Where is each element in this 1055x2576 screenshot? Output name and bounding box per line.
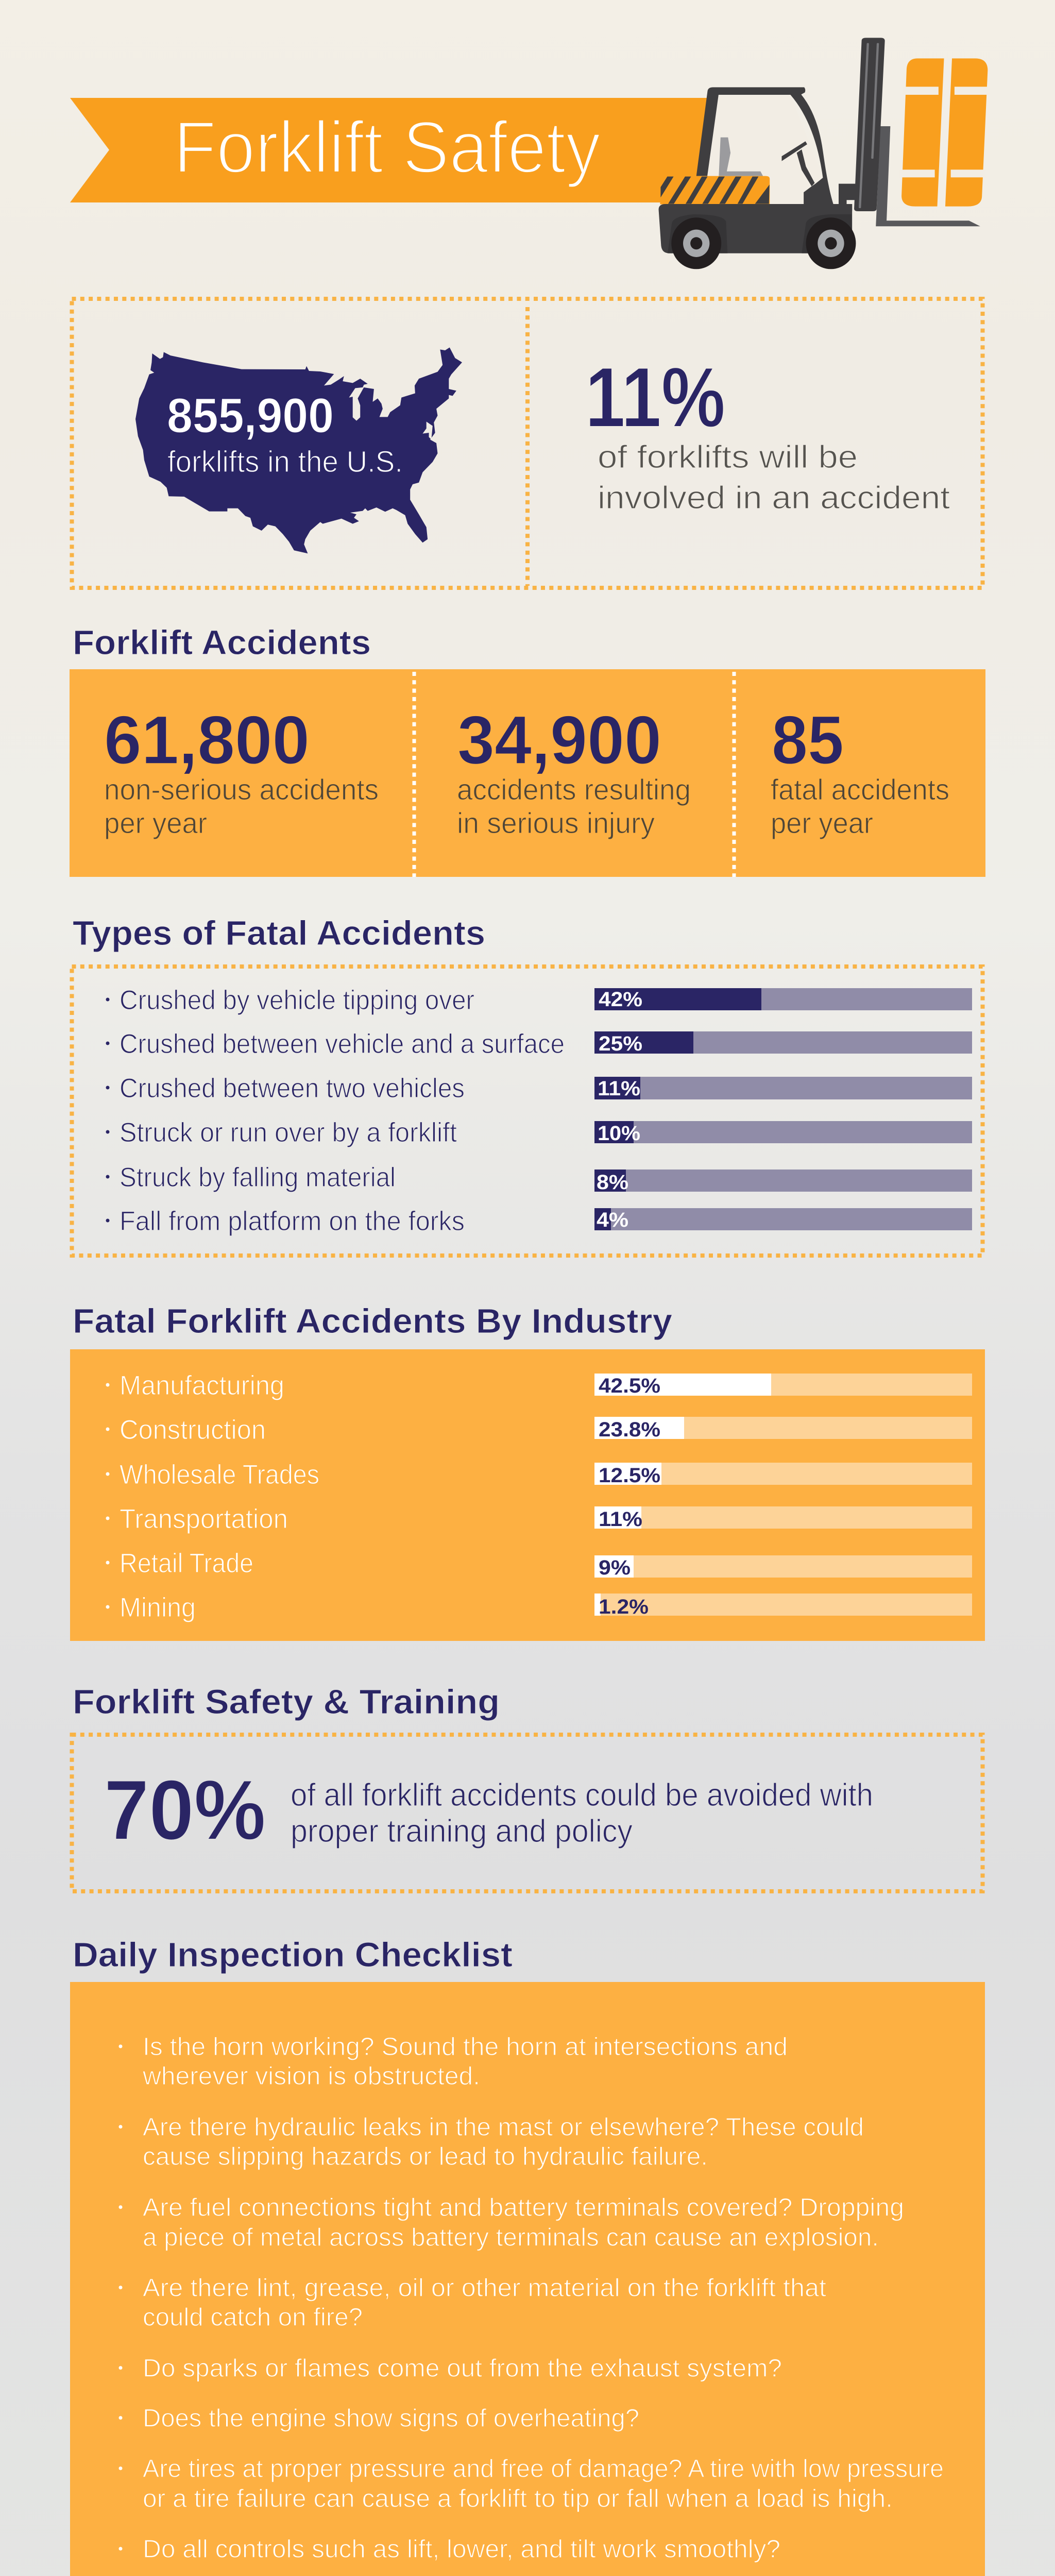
caption: accident share [598, 439, 950, 516]
panel: forklift accidents [70, 669, 985, 877]
chart row: transportation: Transportation [120, 1504, 288, 1534]
checklist item: hydraulic leaks: Are there hydraulic leaks in the mast or elsewhere? These could [143, 2113, 864, 2141]
chart row: two vehicles 11%: 11% [598, 1077, 640, 1100]
icon: US map [135, 347, 462, 553]
stat: non-serious accidents: 61,800 [104, 702, 310, 778]
stat: serious injury: in serious injury [457, 807, 655, 840]
checklist item: horn: Is the horn working? Sound the horn at intersections and [143, 2033, 788, 2061]
chart row: wholesale trades: 12.5% [599, 1464, 660, 1487]
chart row: surface 25%: 25% [599, 1032, 642, 1055]
chart row: retail trade: Retail Trade [120, 1548, 253, 1579]
checklist item: overheating: Does the engine show signs of overheating? [143, 2404, 639, 2432]
caption: accident share: involved in an accident [598, 480, 950, 516]
panel: types of fatal accidents [72, 967, 983, 1256]
stat: fatal accidents [771, 702, 949, 840]
checklist item: lint and grease [118, 2274, 826, 2331]
chart row: run over 10%: 10% [598, 1122, 640, 1145]
checklist item: hydraulic leaks: cause slipping hazards or lead to hydraulic failure. [143, 2143, 708, 2171]
heading: Daily Inspection Checklist: Daily Inspection Checklist [73, 1936, 513, 1974]
chart row: wholesale trades [106, 1460, 972, 1490]
chart row: tipping 42%: 42% [599, 988, 642, 1011]
chart row: transportation: 11% [599, 1508, 642, 1531]
chart row: tipping 42%: Crushed by vehicle tipping over [120, 985, 474, 1015]
chart row: platform 4% [106, 1206, 972, 1236]
title: Forklift Safety [174, 107, 601, 189]
chart row: run over 10% [106, 1117, 972, 1148]
checklist item: lint and grease: could catch on fire? [143, 2303, 363, 2331]
checklist item: fuel connections [118, 2194, 904, 2251]
checklist item: horn [118, 2033, 788, 2090]
heading: Types of Fatal Accidents: Types of Fatal Accidents [73, 914, 485, 953]
stat: serious injury [457, 702, 691, 840]
heading: Fatal Forklift Accidents By Industry: Fatal Forklift Accidents By Industry [73, 1302, 672, 1341]
caption: forklifts in the U.S.: forklifts in the U.S. [167, 445, 403, 479]
chart row: wholesale trades: Wholesale Trades [120, 1460, 319, 1490]
chart row: falling material 8% [106, 1162, 972, 1194]
stat: non-serious accidents: per year [104, 807, 207, 840]
checklist item: sparks: Do sparks or flames come out from the exhaust system? [143, 2354, 782, 2382]
stat: 11%: 11% [585, 350, 725, 445]
heading: Forklift Safety & Training: Forklift Safety & Training [73, 1683, 500, 1721]
panel: forklift counts [72, 299, 983, 588]
panel: daily inspection checklist [70, 1982, 985, 2576]
chart row: falling material 8%: 8% [597, 1171, 628, 1194]
checklist item: tires: or a tire failure can cause a forklift to tip or fall when a load is high. [143, 2485, 893, 2513]
chart row: manufacturing: Manufacturing [120, 1370, 284, 1401]
stat: 70%: 70% [104, 1762, 266, 1857]
checklist item: horn: wherever vision is obstructed. [142, 2062, 480, 2090]
stat: serious injury: 34,900 [457, 702, 661, 778]
checklist item: tires [118, 2455, 944, 2513]
chart row: tipping 42% [106, 985, 972, 1015]
checklist item: fuel connections: Are fuel connections tight and battery terminals covered? Dropping [143, 2194, 904, 2222]
stat: fatal accidents: fatal accidents [771, 773, 949, 806]
chart row: platform 4%: Fall from platform on the forks [120, 1206, 465, 1236]
chart row: falling material 8%: Struck by falling material [120, 1162, 396, 1193]
chart row: construction: Construction [120, 1415, 266, 1445]
checklist item: fuel connections: a piece of metal across battery terminals can cause an explosion. [143, 2224, 879, 2251]
chart row: retail trade: 9% [599, 1556, 631, 1579]
stat: serious injury: accidents resulting [457, 773, 691, 806]
heading: Forklift Accidents: Forklift Accidents [73, 623, 371, 662]
checklist item: tires: Are tires at proper pressure and free of damage? A tire with low pressure [143, 2455, 944, 2483]
stat: fatal accidents: per year [771, 807, 873, 840]
icon: forklift [659, 38, 990, 269]
callout text: of all forklift accidents could be avoided with [291, 1777, 873, 1813]
stat: non-serious accidents: non-serious accidents [104, 773, 379, 806]
panel: training callout [72, 1735, 983, 1891]
chart row: construction [106, 1415, 972, 1445]
chart row: two vehicles 11% [106, 1073, 972, 1104]
callout text: proper training and policy [291, 1814, 633, 1849]
stat: non-serious accidents [104, 702, 379, 840]
chart row: manufacturing: 42.5% [599, 1375, 660, 1397]
checklist item: hydraulic leaks [118, 2113, 864, 2171]
chart row: two vehicles 11%: Crushed between two vehicles [120, 1073, 465, 1104]
chart row: mining [106, 1592, 972, 1623]
chart row: manufacturing [106, 1370, 972, 1401]
panel: accidents by industry [70, 1349, 985, 1641]
title banner [70, 98, 709, 202]
chart row: mining: Mining [120, 1592, 196, 1623]
stat: 855,900: 855,900 [167, 388, 334, 443]
checklist item: lint and grease: Are there lint, grease, oil or other material on the forklift that [143, 2274, 826, 2302]
chart row: run over 10%: Struck or run over by a forklift [120, 1117, 457, 1148]
stat: fatal accidents: 85 [772, 702, 844, 778]
chart row: surface 25%: Crushed between vehicle and a surface [120, 1029, 565, 1059]
chart row: surface 25% [106, 1029, 972, 1059]
callout text [291, 1777, 873, 1849]
chart row: construction: 23.8% [599, 1418, 660, 1441]
checklist item: controls: Do all controls such as lift, lower, and tilt work smoothly? [143, 2535, 780, 2563]
chart row: retail trade [106, 1548, 972, 1579]
chart row: transportation [106, 1504, 972, 1534]
caption: accident share: of forklifts will be [598, 439, 858, 475]
chart row: mining: 1.2% [599, 1596, 649, 1618]
chart row: platform 4%: 4% [597, 1209, 628, 1231]
